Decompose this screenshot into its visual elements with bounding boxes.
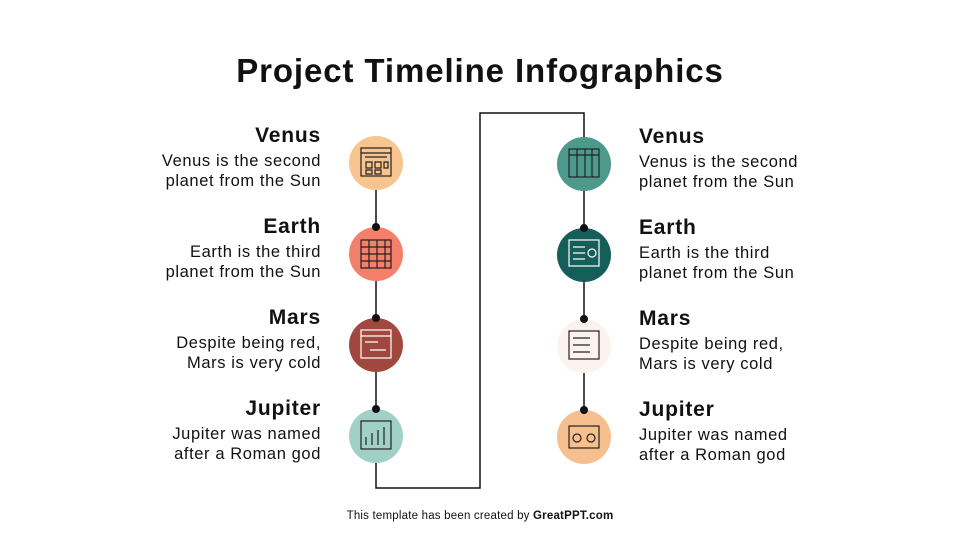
text: Mars right: Mars xyxy=(639,307,691,330)
text: Earth left xyxy=(166,215,321,281)
text: Jupiter left xyxy=(172,397,321,463)
text: Mars left: Mars xyxy=(269,306,321,329)
left circles xyxy=(349,136,403,463)
text: Earth right: Earth is the third xyxy=(639,244,770,262)
text: Jupiter right: Jupiter was named xyxy=(639,426,788,444)
text: Jupiter right xyxy=(639,398,788,464)
text: Earth right: Earth xyxy=(639,216,697,239)
text: Jupiter left: Jupiter was named xyxy=(172,425,321,443)
text: Earth right: planet from the Sun xyxy=(639,264,794,282)
text: Mars left: Mars is very cold xyxy=(187,354,321,372)
text: Venus left: Venus is the second xyxy=(162,152,321,170)
text: Venus left: Venus xyxy=(255,124,321,147)
right circles xyxy=(557,137,611,464)
text: Jupiter right: after a Roman god xyxy=(639,446,786,464)
text: Mars left: Despite being red, xyxy=(176,334,321,352)
icons xyxy=(361,148,599,449)
text: Earth left: Earth is the third xyxy=(190,243,321,261)
text: Earth left: planet from the Sun xyxy=(166,263,321,281)
text: Jupiter right: Jupiter xyxy=(639,398,715,421)
text: Venus left: planet from the Sun xyxy=(166,172,321,190)
text: Mars left xyxy=(176,306,321,372)
text: Venus right: Venus is the second xyxy=(639,153,798,171)
text: Mars right: Mars is very cold xyxy=(639,355,773,373)
dots xyxy=(372,223,588,414)
text: Jupiter left: after a Roman god xyxy=(174,445,321,463)
text: Earth left: Earth xyxy=(263,215,321,238)
footer: This template has been created by GreatPPT.com xyxy=(347,510,613,522)
text: Jupiter left: Jupiter xyxy=(245,397,321,420)
text: Mars right xyxy=(639,307,784,373)
title: Project Timeline Infographics xyxy=(236,52,724,89)
text: Venus right: planet from the Sun xyxy=(639,173,794,191)
text: Venus right xyxy=(639,125,798,191)
text: Earth right xyxy=(639,216,794,282)
text: Venus right: Venus xyxy=(639,125,705,148)
text: Venus left xyxy=(162,124,321,190)
text: Mars right: Despite being red, xyxy=(639,335,784,353)
